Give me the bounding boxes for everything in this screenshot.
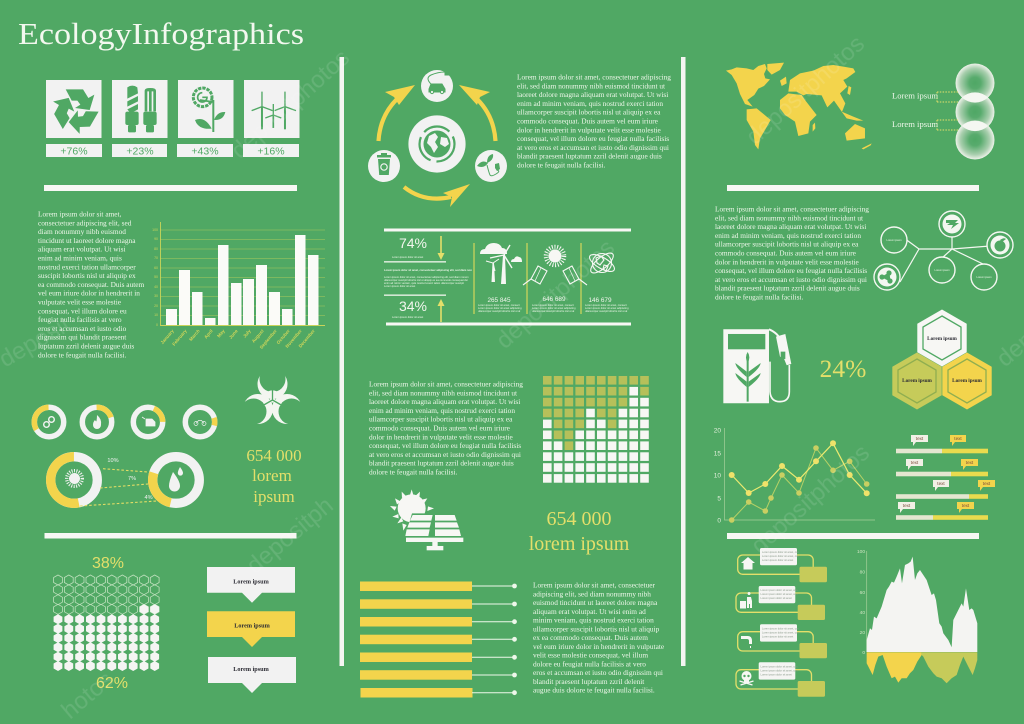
text block: left column intro: dolore te feugait nulla facilisi.	[38, 350, 126, 359]
hexagon pictogram: 38% / 62%: 38%	[92, 555, 124, 572]
stat 646 689: Lorem ipsum dolor sit amet adipiscing	[532, 306, 576, 310]
icon: sun	[67, 471, 82, 486]
orb stack with labels: Lorem ipsum	[892, 119, 938, 129]
text block: centre top: Lorem ipsum dolor sit amet, consectetuer adipiscing	[517, 72, 671, 82]
cycle diagram	[368, 70, 507, 207]
bar chart: monthly values: July	[242, 328, 252, 339]
watermark: depositphotos	[741, 30, 870, 150]
hexagon pictogram: 38% / 62%	[54, 555, 159, 692]
bar chart: monthly values: 80	[154, 247, 158, 251]
flow item: home: Lorem ipsum dolor sit amet, con	[762, 550, 799, 554]
progress bars with tags: text	[903, 503, 911, 508]
callout stack	[207, 567, 296, 693]
icon: leaf plug	[477, 154, 500, 176]
flow list with icons	[736, 548, 827, 697]
callout stack: Lorem ipsum	[233, 666, 270, 673]
network diagram: Lorem ipsum	[886, 238, 902, 242]
34 percent stat: Lorem ipsum dolor sit amet	[392, 315, 424, 319]
text block: left column intro: tincidunt ut laoreet dolore magna	[38, 236, 136, 245]
stat 146 679: Lorem ipsum dolor sit amet, consect	[585, 303, 627, 307]
text block: centre top: consequat, vel illum dolore eu feugiat nulla facilisis	[517, 134, 669, 143]
bar chart: monthly values: 10	[154, 313, 158, 317]
icon: sun and solar panels	[523, 247, 587, 285]
bar chart: monthly values: February	[171, 328, 188, 347]
icon: wind turbines	[244, 80, 300, 138]
stat 646 689: 646 689	[542, 296, 566, 303]
icon: atom globe	[587, 250, 617, 276]
stat 646 689: Lorem ipsum dolor sit amet, consect	[532, 303, 574, 307]
text block: centre middle: consequat, vel illum dolore eu feugiat nulla facilisis	[369, 441, 521, 450]
striped bar list	[360, 582, 517, 698]
title: EcologyInfographics	[18, 16, 304, 51]
bar chart: monthly values: 100	[152, 228, 158, 232]
text block: centre top: dolor in hendrerit in vulputate velit esse molestie	[517, 125, 661, 134]
bar chart: monthly values: September	[259, 328, 278, 350]
bar chart: monthly values: April	[203, 328, 214, 340]
icon: recycle	[46, 80, 102, 138]
panel: icon tiles	[46, 80, 300, 158]
74 percent stat	[384, 235, 446, 262]
area chart: 80	[860, 570, 865, 576]
watermark: depositphotos	[491, 234, 620, 354]
bar chart: monthly values: January	[160, 328, 175, 345]
line chart: 10	[714, 472, 721, 480]
bar chart: monthly values: 40	[154, 285, 158, 289]
flow item: water tap: Lorem ipsum dolor sit amet	[762, 634, 794, 638]
area chart	[857, 549, 977, 683]
stat 146 679	[585, 297, 629, 313]
hexagon cluster: Lorem ipsum	[902, 378, 933, 384]
line chart: 0	[717, 518, 721, 524]
donut row: four small resource rings	[29, 402, 218, 442]
big number: 654 000 lorem ipsum: lorem	[252, 466, 292, 485]
text block: centre bottom: aliquam erat volutpat. Ut wisi enim ad	[533, 607, 646, 616]
stat 265 845: 265 845	[487, 297, 511, 304]
percentage labels: +23%	[126, 146, 154, 158]
orb stack with labels: Lorem ipsum	[892, 90, 938, 100]
stat 146 679: Lorem ipsum dolor sit amet adipiscing	[585, 306, 629, 310]
text block: centre bottom: minim veniam, quis nostrud exerci tation	[533, 616, 654, 624]
hexagon cluster: Lorem ipsum	[927, 336, 958, 342]
flow item: recycling person: Lorem ipsum dolor sit amet, con	[760, 592, 798, 596]
bar chart: monthly values: 90	[154, 237, 158, 241]
text block: right column: elit, sed diam nonummy nibh euismod tincidunt ut	[715, 213, 863, 222]
text block: centre top: at vero eros et accumsan et iusto odio dignissim qui	[517, 143, 669, 152]
hexagon pictogram: 38% / 62%: 62%	[96, 675, 128, 692]
percentage labels: +43%	[191, 146, 219, 158]
stat 146 679: ullamcorper suscipit lobortis nisl ut al	[585, 309, 628, 313]
icon: electric car	[428, 70, 449, 94]
flow item: home	[738, 548, 827, 582]
icon: biofuel pump	[723, 329, 791, 403]
text block: left column intro: eros et accumsan et iusto odio	[38, 324, 127, 333]
bar chart: monthly values: June	[228, 328, 239, 340]
donut pair with dashed connectors: 10%	[107, 458, 119, 464]
big number: 654 000 lorem ipsum centre	[529, 508, 630, 555]
text block: centre bottom: ullamcorper suscipit lobortis nisl ut aliquip	[533, 624, 660, 633]
icon: recycling bin	[377, 153, 391, 175]
big number: 654 000 lorem ipsum: ipsum	[253, 487, 295, 506]
flow item: skull: Lorem ipsum dolor sit amet, con	[760, 664, 798, 668]
icon: clouds and wind turbines	[480, 243, 522, 284]
stat 265 845: Lorem ipsum dolor sit amet, consect	[478, 303, 520, 307]
text block: left column intro: feugiat nulla facilisis at vero	[38, 315, 122, 324]
text block: left column intro: diam nonummy nibh euismod	[38, 227, 126, 236]
percentage labels	[46, 144, 299, 158]
progress bars with tags: text	[937, 481, 945, 486]
percentage labels: +76%	[60, 146, 88, 158]
progress bars with tags: text	[966, 460, 974, 465]
orb stack with labels	[892, 64, 994, 160]
stat 646 689	[532, 296, 576, 313]
bar chart: monthly values: August	[251, 328, 265, 344]
big number: 654 000 lorem ipsum	[246, 446, 302, 506]
bar chart: monthly values: March	[188, 328, 201, 342]
network diagram	[874, 211, 1013, 290]
text block: left column intro: suscipit lobortis nisl ut aliquip ex	[38, 271, 136, 280]
text block: right column: blandit praesent luptatum zzril delenit augue duis	[715, 284, 860, 293]
stat 646 689: ullamcorper suscipit lobortis nisl ut al	[532, 309, 575, 313]
text block: centre bottom: dolore eu feugiat nulla facilisis at vero	[533, 659, 646, 668]
icon: biohazard	[240, 366, 304, 424]
panel: energy statistics	[384, 228, 631, 326]
middle fine print: Lorem ipsum dolor sit amet, consectetuer adipiscing elit, sed diam nonum	[384, 275, 468, 279]
text block: left column intro: dignissim qui blandit praesent	[38, 333, 126, 342]
text block: centre bottom: augue duis dolore te feugait nulla facilisi.	[533, 686, 655, 694]
bar chart: monthly values: October	[276, 328, 291, 345]
text block: centre bottom: blandit praesent luptatum zzril delenit	[533, 677, 644, 686]
bar chart: monthly values: 20	[154, 304, 158, 308]
middle fine print: enim ad minim veniam, quis nostrud exerci tation ullamcorper suscipit	[384, 281, 464, 285]
world map	[726, 63, 872, 149]
line chart	[714, 428, 875, 524]
hexagon cluster	[892, 310, 992, 410]
flow item: home: Lorem ipsum dolor sit amet, con	[762, 554, 799, 558]
flow item: recycling person: Lorem ipsum dolor sit amet	[760, 596, 792, 600]
text block: centre middle: ullamcorper suscipit lobortis nisl ut aliquip ex ea	[369, 415, 513, 424]
flow item: water tap: Lorem ipsum dolor sit amet, con	[762, 630, 799, 634]
text block: centre top: ullamcorper suscipit lobortis nisl ut aliquip ex ea	[517, 108, 661, 117]
progress bars with tags: text	[962, 503, 970, 508]
flow item: skull: Lorem ipsum dolor sit amet, con	[760, 668, 798, 672]
text block: centre middle: elit, sed diam nonummy nibh euismod tincidunt ut	[369, 388, 517, 397]
text block: left column intro: vel eum iriure dolor in hendrerit in	[38, 289, 140, 298]
bar chart: monthly values: 30	[154, 294, 158, 298]
line chart: 15	[714, 450, 721, 458]
icon: earth	[420, 126, 454, 162]
74 percent stat: Lorem ipsum dolor sit amet	[392, 255, 424, 259]
text block: centre top: elit, sed diam nonummy nibh euismod tincidunt ut	[517, 81, 665, 90]
text block: left column intro: nostrud exerci tation ullamcorper	[38, 262, 136, 271]
watermark: depositph	[242, 492, 339, 580]
text block: right column: ullamcorper suscipit lobortis nisl ut aliquip ex ea	[715, 240, 859, 249]
text block: right column: consequat, vel illum dolore eu feugiat nulla facilisis	[715, 266, 867, 275]
network diagram: Lorem ipsum	[934, 268, 950, 272]
text block: centre bottom: ex ea commodo consequat. Duis autem	[533, 633, 648, 642]
network diagram: Lorem ipsum	[976, 275, 992, 279]
callout stack: Lorem ipsum	[234, 622, 271, 630]
donut pair with dashed connectors: 7%	[128, 476, 136, 482]
bar chart: monthly values: 50	[154, 275, 158, 279]
bar chart: monthly values: May	[216, 328, 226, 338]
big number: 654 000 lorem ipsum centre: 654 000	[546, 508, 612, 530]
text block: centre middle: dolore te feugait nulla facilisi.	[369, 468, 457, 476]
progress bars with tags: text	[983, 481, 991, 486]
text block: left column intro: consectetuer adipiscing elit, sed	[38, 218, 132, 227]
column divider left	[340, 57, 344, 666]
text block: left column intro: vulputate velit esse molestie	[38, 298, 121, 306]
flow item: recycling person: Lorem ipsum dolor sit amet, con	[760, 588, 798, 592]
text block: left column intro: enim ad minim veniam, quis	[38, 254, 122, 262]
progress bars with tags: text	[916, 436, 924, 441]
stat 265 845: ullamcorper suscipit lobortis nisl ut al	[478, 309, 521, 313]
text block: centre middle: at vero eros et accumsan et iusto odio dignissim qui	[369, 450, 521, 459]
text block: centre bottom: vel eum iriure dolor in hendrerit in vulputate	[533, 642, 664, 651]
text block: centre middle: blandit praesent luptatum zzril delenit augue duis	[369, 459, 514, 468]
34 percent stat	[384, 294, 446, 322]
text block: centre middle: enim ad minim veniam, quis nostrud exerci tation	[369, 406, 515, 415]
text block: right column: at vero eros et accumsan et iusto odio dignissim qui	[715, 275, 867, 284]
line chart: 20	[714, 428, 721, 434]
column divider right	[681, 57, 686, 666]
text block: centre middle: dolor in hendrerit in vulputate velit esse molestie	[369, 432, 513, 441]
text block: centre middle: Lorem ipsum dolor sit amet, consectetuer adipiscing	[369, 380, 523, 388]
icon: sun and solar panel	[390, 489, 463, 550]
text block: left column intro: aliquam erat volutpat. Ut wisi	[38, 245, 126, 254]
watermark: hotos	[57, 666, 119, 724]
flow item: water tap: Lorem ipsum dolor sit amet, con	[762, 626, 799, 630]
text block: left column intro: luptatum zzril delenit augue duis	[38, 342, 134, 350]
middle fine print: Lorem ipsum dolor sit amet	[384, 284, 416, 288]
bar chart: monthly values: 60	[154, 266, 158, 270]
big number: 654 000 lorem ipsum: 654 000	[246, 446, 302, 465]
callout stack: Lorem ipsum	[233, 578, 270, 586]
percentage labels: +16%	[257, 146, 285, 158]
bar chart: monthly values: 0	[156, 323, 158, 327]
text block: right column: dolore te feugait nulla facilisi.	[715, 292, 803, 302]
text block: right column: dolor in hendrerit in vulputate velit esse molestie	[715, 257, 859, 266]
middle fine print	[384, 268, 472, 288]
progress bars with tags: text	[954, 436, 962, 441]
bar chart: monthly values: 70	[154, 256, 158, 260]
text block: centre bottom: Lorem ipsum dolor sit amet, consectetuer	[533, 580, 656, 590]
bar chart: monthly values: November	[284, 328, 303, 349]
donut pair with dashed connectors: 4%	[144, 495, 153, 501]
area chart: 20	[860, 630, 865, 636]
stat 265 845: Lorem ipsum dolor sit amet adipiscing	[478, 306, 522, 310]
text block: centre top: commodo consequat. Duis autem vel eum iriure	[517, 116, 658, 126]
area chart: 40	[860, 610, 865, 616]
flow item: home: Lorem ipsum dolor sit amet	[762, 558, 794, 562]
icon: sunflower	[178, 80, 234, 138]
icon: energy saving bulbs	[112, 80, 168, 138]
stat 146 679: 146 679	[588, 297, 612, 304]
text block: centre top: laoreet dolore magna aliquam erat volutpat. Ut wisi	[517, 90, 668, 99]
area chart: 100	[857, 549, 865, 555]
text block: centre bottom: eros et accumsan et iusto odio dignissim qui	[533, 668, 663, 677]
text block: centre top: dolore te feugait nulla facilisi.	[517, 160, 605, 170]
text block: centre middle: laoreet dolore magna aliquam erat volutpat. Ut wisi	[369, 397, 520, 406]
stat 265 845	[478, 297, 522, 313]
text block: left column intro: Lorem ipsum dolor sit amet,	[38, 210, 122, 218]
progress bars with tags	[896, 435, 995, 520]
74 percent stat: 74%	[399, 235, 427, 251]
text block: centre bottom: velit esse molestie consequat, vel illum	[533, 650, 648, 660]
text block: left column intro: ea commodo consequat. Duis autem	[38, 280, 145, 289]
text block: right column: Lorem ipsum dolor sit amet, consectetuer adipiscing	[715, 204, 869, 214]
text block: centre bottom: adipiscing elit, sed diam nonummy nibh	[533, 589, 651, 598]
text block: right column: enim ad minim veniam, quis nostrud exerci tation	[715, 231, 861, 240]
stat: 24 percent: 24%	[820, 354, 866, 383]
text block: right column: commodo consequat. Duis autem vel eum iriure	[715, 248, 856, 258]
bar chart: monthly values	[152, 222, 325, 350]
bar chart: monthly values: December	[298, 328, 316, 349]
text block: centre bottom: euismod tincidunt ut laoreet dolore magna	[533, 598, 658, 607]
big number: 654 000 lorem ipsum centre: lorem ipsum	[529, 533, 630, 555]
watermark: depositphotos	[226, 44, 355, 164]
middle fine print: Lorem ipsum dolor sit amet, consectetuer adipiscing elit, sed diam non	[384, 268, 472, 272]
hexagon cluster: Lorem ipsum	[952, 378, 983, 384]
donut pair with dashed connectors	[47, 451, 205, 509]
flow item: water tap	[738, 624, 827, 658]
progress bars with tags: text	[911, 460, 919, 465]
text block: centre middle: commodo consequat. Duis autem vel eum iriure	[369, 424, 510, 432]
line chart: 5	[717, 496, 721, 502]
watermark: depositphotos	[746, 439, 875, 559]
text block: right column: laoreet dolore magna aliquam erat volutpat. Ut wisi	[715, 222, 866, 231]
flow item: skull: Lorem ipsum dolor sit amet	[760, 672, 792, 676]
flow item: skull	[736, 662, 825, 697]
text block: centre top: enim ad minim veniam, quis nostrud exerci tation	[517, 99, 663, 108]
34 percent stat: 34%	[399, 298, 427, 314]
middle fine print: ullamcorper suscipit lobortis nisl ut aliquip ex ea commodo consequat dui	[384, 278, 468, 282]
text block: centre top: blandit praesent luptatum zzril delenit augue duis	[517, 152, 662, 161]
area chart: 0	[862, 650, 865, 656]
icon: water drops	[169, 467, 183, 491]
flow item: recycling person	[736, 586, 825, 620]
text block: left column intro: consequat, vel illum dolore eu	[38, 306, 127, 315]
square grid chart	[543, 376, 649, 483]
area chart: 60	[860, 590, 865, 596]
